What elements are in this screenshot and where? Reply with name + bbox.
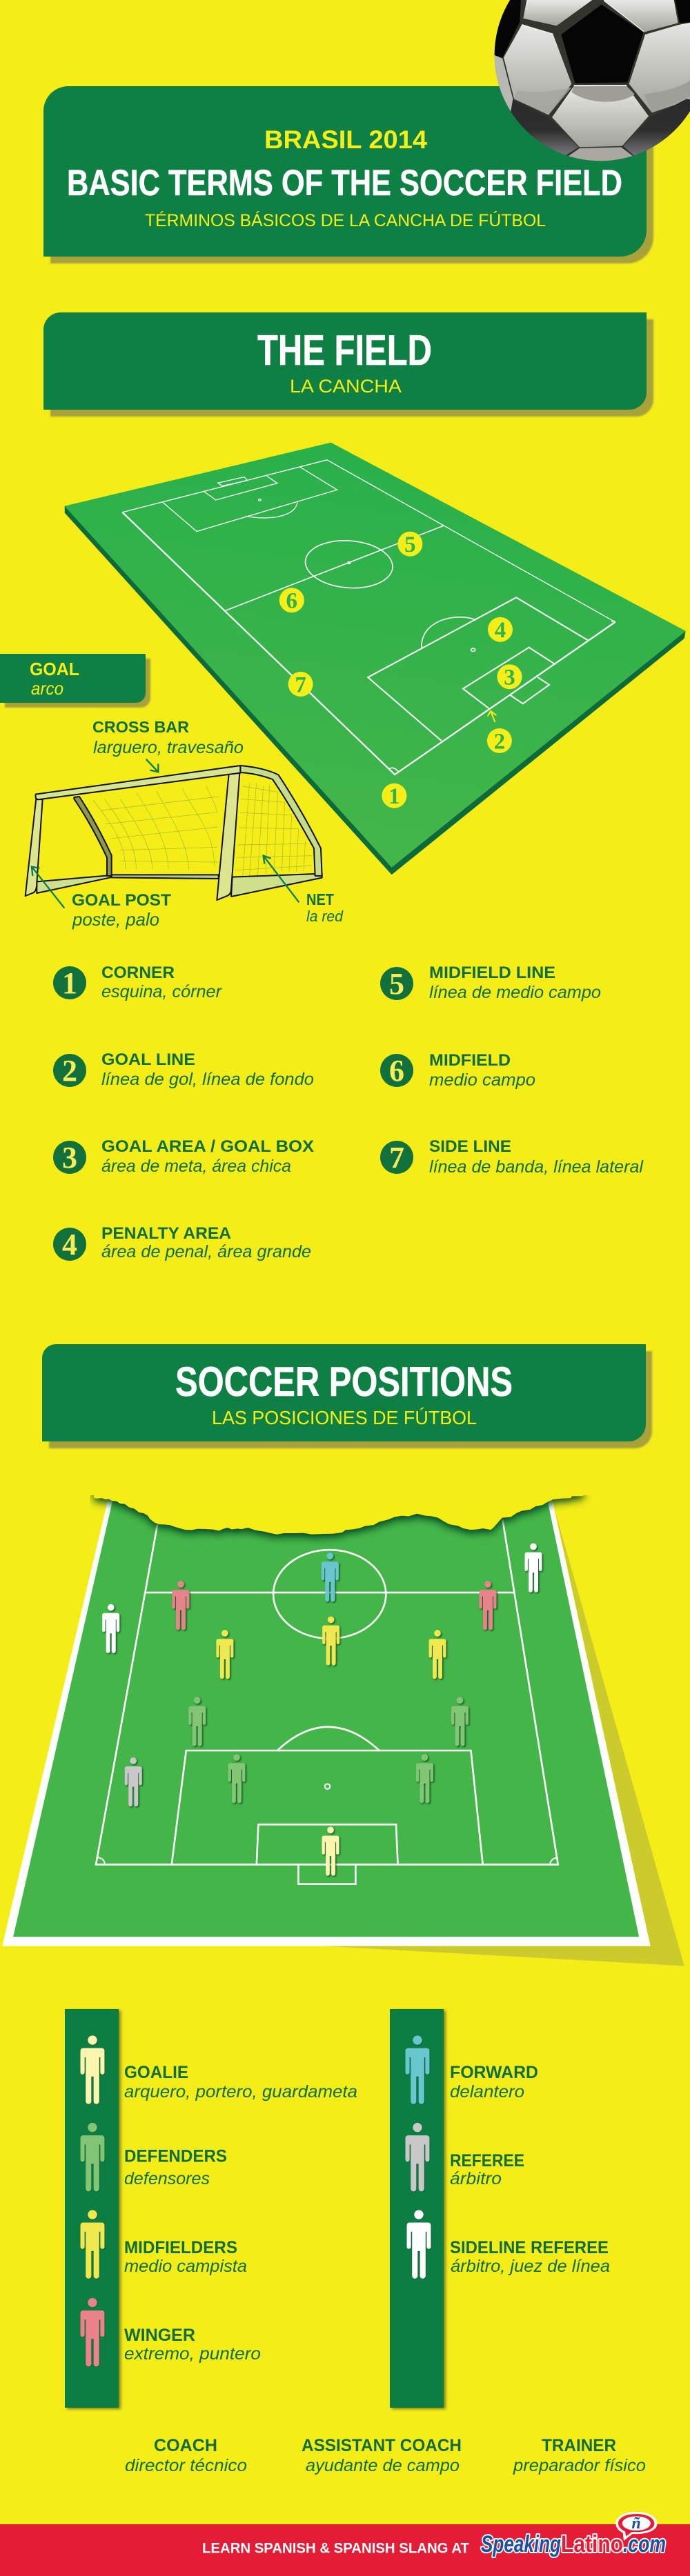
marker 7: 7 — [295, 672, 306, 697]
label: net: la red — [306, 908, 344, 925]
marker 5: 5 — [404, 532, 416, 557]
legend: goalie — [81, 2035, 357, 2104]
staff: trainer: preparador físico — [513, 2456, 646, 2475]
legend: sideline referee — [407, 2210, 610, 2279]
legend: winger — [81, 2298, 261, 2366]
staff: coach: director técnico — [125, 2456, 247, 2475]
legend strip: left — [65, 2009, 119, 2408]
term 1: corner: esquina, córner — [101, 982, 223, 1001]
arrow: goal post — [32, 867, 64, 908]
legend: defenders: DEFENDERS — [124, 2146, 227, 2166]
term 2: goal line: GOAL LINE — [101, 1050, 195, 1069]
heading: the field: THE FIELD — [257, 327, 432, 375]
term 5: midfield line: 5 — [389, 967, 404, 1001]
staff: assistant coach — [302, 2436, 462, 2475]
logo: speaking latino: .com — [623, 2531, 666, 2557]
label: goal: GOAL — [30, 659, 79, 679]
staff: assistant coach: ASSISTANT COACH — [302, 2436, 462, 2455]
marker 1: 1 — [388, 784, 400, 809]
legend: goalie: arquero, portero, guardameta — [124, 2082, 357, 2101]
legend: midfielders — [81, 2210, 247, 2279]
arrow: net — [264, 856, 299, 902]
label: goal post: GOAL POST — [72, 891, 171, 910]
term 3: goal area — [53, 1137, 314, 1176]
logo speech bubble — [615, 2512, 657, 2541]
arrow: goal line pointer — [488, 711, 496, 722]
term 2: goal line: 2 — [62, 1054, 77, 1088]
staff: trainer — [513, 2436, 646, 2475]
marker 7 — [288, 672, 313, 697]
term 6: midfield: MIDFIELD — [429, 1051, 511, 1070]
term 6: midfield: medio campo — [429, 1070, 535, 1090]
header panel: soccer positions — [42, 1344, 652, 1448]
marker 3 — [497, 664, 522, 690]
legend strip: right — [390, 2009, 444, 2408]
icon: soccer ball — [483, 0, 690, 166]
legend: sideline referee: árbitro, juez de línea — [451, 2257, 610, 2276]
marker 1 — [382, 783, 406, 809]
marker 6 — [279, 588, 304, 614]
logo: speaking latino: Speaking — [481, 2531, 561, 2557]
footer bar — [0, 2524, 690, 2576]
marker 3: 3 — [504, 665, 515, 690]
logo: speaking latino — [481, 2512, 666, 2557]
term 3: goal area: área de meta, área chica — [101, 1157, 291, 1176]
logo: speaking latino: Latino — [561, 2531, 623, 2557]
term 3: goal area: 3 — [62, 1141, 77, 1175]
footer text: LEARN SPANISH & SPANISH SLANG AT — [202, 2541, 469, 2556]
label: goal post — [72, 891, 171, 930]
term 2: goal line — [53, 1050, 314, 1089]
term 1: corner — [53, 963, 223, 1001]
label: cross bar: CROSS BAR — [92, 718, 189, 736]
term 4: penalty area: PENALTY AREA — [101, 1224, 231, 1243]
marker 4 — [488, 617, 513, 643]
legend: winger: WINGER — [124, 2326, 195, 2345]
term 5: midfield line: MIDFIELD LINE — [429, 963, 555, 982]
term 7: side line: línea de banda, línea lateral — [429, 1157, 644, 1177]
torn paper edge — [94, 1483, 583, 1535]
staff: assistant coach: ayudante de campo — [306, 2456, 460, 2475]
label: goal post: poste, palo — [72, 909, 159, 930]
term 4: penalty area: 4 — [62, 1228, 77, 1261]
label: cross bar — [92, 718, 244, 757]
staff: coach — [125, 2436, 247, 2475]
staff: trainer: TRAINER — [542, 2436, 616, 2455]
term 6: midfield: 6 — [389, 1054, 404, 1088]
net: back — [93, 786, 219, 870]
legend: goalie: GOALIE — [124, 2063, 188, 2082]
marker 2 — [487, 728, 512, 754]
header panel: title — [43, 86, 653, 263]
legend: midfielders: medio campista — [124, 2257, 247, 2276]
term 2: goal line: línea de gol, línea de fondo — [101, 1070, 314, 1089]
players on the field — [102, 1544, 542, 1876]
subheading: las posiciones de fútbol: LAS POSICIONES DE FÚTBOL — [212, 1407, 477, 1428]
term 4: penalty area — [53, 1224, 311, 1261]
staff: coach: COACH — [154, 2436, 217, 2455]
diagram: perspective field — [65, 443, 686, 875]
term 3: goal area: GOAL AREA / GOAL BOX — [101, 1137, 314, 1156]
diagram: positions field — [2, 1483, 684, 1966]
illustration: goal frame and net — [26, 759, 322, 908]
title: spanish subtitle: TÉRMINOS BÁSICOS DE LA CANCHA DE FÚTBOL — [145, 210, 546, 230]
net: side — [236, 783, 312, 876]
legend: referee: árbitro — [450, 2169, 502, 2188]
term 7: side line: 7 — [389, 1141, 404, 1175]
legend: winger: extremo, puntero — [124, 2344, 261, 2364]
legend: referee — [406, 2123, 524, 2191]
legend: defenders — [81, 2123, 227, 2191]
term 7: side line: SIDE LINE — [429, 1137, 511, 1156]
title: brasil 2014: BRASIL 2014 — [264, 126, 427, 154]
label: net — [306, 890, 344, 925]
header panel: the field — [43, 312, 653, 417]
marker 5 — [397, 532, 422, 557]
term 4: penalty area: área de penal, área grande — [101, 1242, 311, 1261]
legend: sideline referee: SIDELINE REFEREE — [450, 2238, 609, 2257]
term 1: corner: CORNER — [101, 963, 175, 982]
marker 4: 4 — [495, 618, 506, 643]
legend: midfielders: MIDFIELDERS — [124, 2238, 237, 2257]
marker 2: 2 — [494, 729, 505, 754]
legend: referee: REFEREE — [450, 2151, 524, 2170]
subheading: la cancha: LA CANCHA — [290, 376, 402, 397]
label panel: goal — [0, 654, 150, 708]
label: cross bar: larguero, travesaño — [93, 738, 244, 757]
marker 6: 6 — [286, 589, 297, 614]
term 5: midfield line — [380, 963, 601, 1002]
legend: forward: FORWARD — [450, 2063, 538, 2082]
legend: forward — [406, 2035, 538, 2104]
label: arco: arco — [31, 678, 63, 699]
legend: forward: delantero — [450, 2082, 524, 2101]
term 6: midfield — [380, 1051, 535, 1090]
term 1: corner: 1 — [62, 966, 77, 1000]
term 5: midfield line: línea de medio campo — [429, 983, 601, 1002]
logo: speaking latino: ñ — [631, 2515, 641, 2533]
label: net: NET — [306, 890, 334, 908]
legend: defenders: defensores — [124, 2169, 210, 2188]
arrow: cross bar — [146, 759, 158, 772]
term 7: side line — [380, 1137, 644, 1177]
heading: soccer positions: SOCCER POSITIONS — [175, 1359, 513, 1405]
